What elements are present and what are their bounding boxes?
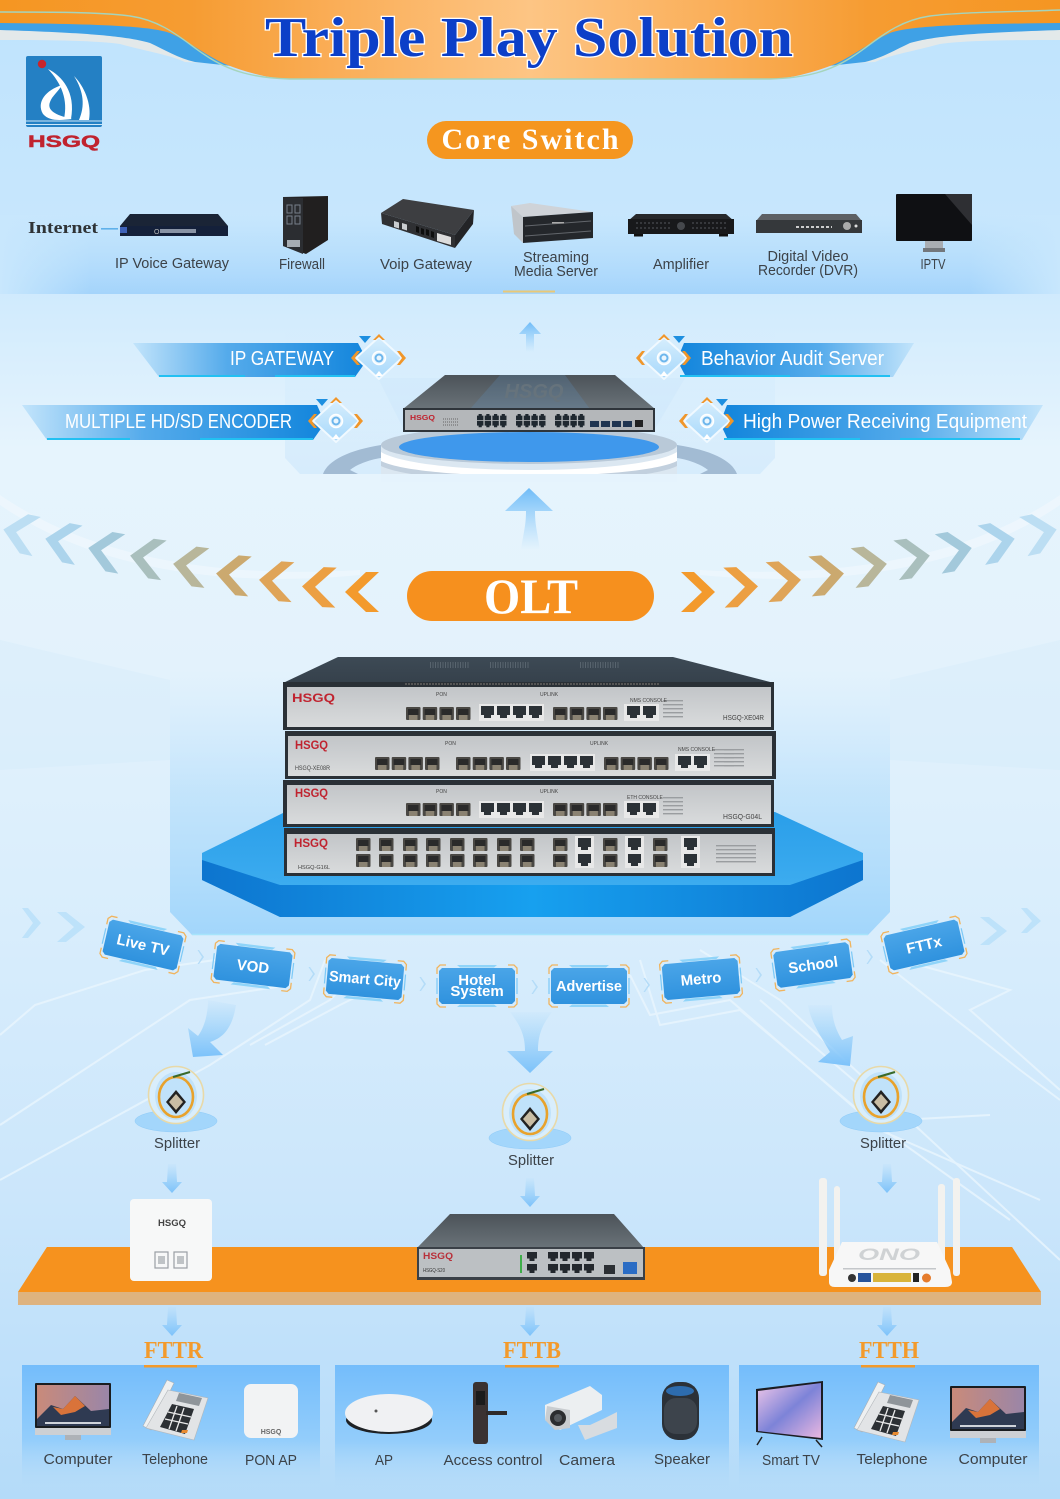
unit: HSGQ-XE04R: HSGQ xyxy=(292,693,335,705)
panel: OLT stage xyxy=(170,670,890,935)
device: Digital Video Recorder xyxy=(756,214,862,279)
device: access switch: HSGQ-S20 xyxy=(423,1268,445,1274)
device: IPTV xyxy=(896,194,972,273)
switch: 24 port core: HSGQ xyxy=(410,413,435,422)
platform xyxy=(202,812,863,917)
unit: HSGQ-XE04R: NMS CONSOLE xyxy=(630,698,668,704)
arrow: to FTTH xyxy=(877,1307,897,1336)
arrow: splitter to switch xyxy=(520,1178,540,1207)
internet label xyxy=(28,218,118,237)
access control xyxy=(444,1382,542,1469)
device: router xyxy=(819,1178,960,1287)
unit: HSGQ-G16L: HSGQ xyxy=(294,838,328,850)
tag: FTTx: FTTx xyxy=(905,933,944,958)
unit: HSGQ-XE08R: PON xyxy=(445,741,456,747)
arrow: to FTTB xyxy=(520,1307,540,1336)
unit: HSGQ-G04L xyxy=(283,780,774,827)
device: router: ONO xyxy=(858,1245,920,1264)
device: IP Voice Gateway: IP Voice Gateway xyxy=(115,256,230,272)
banner: MULTIPLE HD/SD ENCODER: MULTIPLE HD/SD ENCODER xyxy=(65,411,292,433)
arrow: to center splitter xyxy=(507,1012,553,1073)
splitter: right: Splitter xyxy=(860,1136,906,1152)
header banner xyxy=(0,0,1060,79)
arrow: to core row xyxy=(519,322,541,352)
computer xyxy=(35,1383,113,1468)
AP: AP xyxy=(375,1453,393,1469)
tag: School xyxy=(770,939,856,991)
title: Triple Play Solution xyxy=(265,7,793,69)
telephone: Telephone xyxy=(142,1452,208,1468)
core switch pill: Core Switch xyxy=(442,123,619,156)
OLT pill xyxy=(407,568,654,624)
banner: MULTIPLE HD/SD ENCODER xyxy=(22,397,363,442)
device: Digital Video Recorder: Digital Video xyxy=(768,249,848,265)
tag: Hotel System: Hotel xyxy=(458,972,496,989)
logo: HSGQ xyxy=(26,56,102,151)
tag: Live TV: Live TV xyxy=(115,931,171,960)
panel: FTTR xyxy=(22,1365,320,1490)
heading: FTTB: FTTB xyxy=(503,1338,561,1364)
OLT pill: OLT xyxy=(484,568,578,624)
tag: Advertise: Advertise xyxy=(556,978,622,995)
heading: FTTH: FTTH xyxy=(859,1338,919,1364)
stage cylinder xyxy=(323,426,737,482)
tag: Advertise xyxy=(549,965,629,1007)
unit: HSGQ-XE08R: NMS CONSOLE xyxy=(678,747,716,753)
tag: FTTx xyxy=(880,916,968,974)
device: access switch: HSGQ xyxy=(423,1251,453,1261)
panel: FTTB xyxy=(335,1365,729,1492)
heading: FTTR: FTTR xyxy=(144,1338,204,1364)
speaker: Speaker xyxy=(654,1452,710,1468)
splitter: left: Splitter xyxy=(154,1136,200,1152)
unit: HSGQ-G04L: UPLINK xyxy=(540,789,559,795)
unit: HSGQ-G04L: ETH CONSOLE xyxy=(627,795,664,801)
device: IPTV: IPTV xyxy=(920,257,946,273)
unit: HSGQ-XE08R: HSGQ xyxy=(295,740,328,752)
banner: IP GATEWAY xyxy=(133,334,406,379)
circuit lines background xyxy=(0,950,1060,1260)
computer: Computer xyxy=(958,1452,1028,1468)
device: Amplifier xyxy=(628,214,734,273)
unit: HSGQ-G04L: HSGQ xyxy=(295,788,328,800)
icon: target hexagon xyxy=(636,334,691,379)
PON AP xyxy=(244,1384,298,1469)
banner: Behavior Audit Server: Behavior Audit Server xyxy=(701,348,884,370)
device: Streaming Media Server xyxy=(511,203,598,280)
arrow: to right splitter xyxy=(808,1005,853,1066)
panel: FTTH xyxy=(739,1365,1039,1490)
switch: 24 port core: HSGQ xyxy=(505,381,564,403)
device: Voip Gateway: Voip Gateway xyxy=(380,257,473,273)
PON AP: PON AP xyxy=(245,1453,297,1469)
orange shelf xyxy=(18,1247,1041,1305)
speaker xyxy=(654,1382,710,1468)
unit: HSGQ-XE08R xyxy=(285,731,776,779)
tag: Smart City xyxy=(323,955,407,1003)
telephone xyxy=(142,1380,208,1468)
splitter: right xyxy=(840,1066,922,1152)
AP xyxy=(345,1394,433,1469)
arrow: OLT to core xyxy=(505,488,553,550)
logo: HSGQ: HSGQ xyxy=(28,132,100,151)
banner: High Power Receiving Equipment: High Power Receiving Equipment xyxy=(743,411,1027,433)
device: IP Voice Gateway: O xyxy=(154,229,160,236)
camera: Camera xyxy=(559,1453,616,1469)
banner: Behavior Audit Server xyxy=(636,334,914,379)
unit: HSGQ-XE04R xyxy=(283,657,774,730)
tag: Metro: Metro xyxy=(680,969,722,990)
computer: Computer xyxy=(44,1452,113,1468)
device: Firewall: Firewall xyxy=(279,257,325,273)
arrow: splitter to router xyxy=(877,1164,897,1193)
smart TV: Smart TV xyxy=(762,1453,820,1469)
device: Firewall xyxy=(279,196,328,273)
internet label: Internet xyxy=(28,218,98,237)
unit: HSGQ-G04L: HSGQ-G04L xyxy=(723,814,762,821)
unit: HSGQ-G04L: PON xyxy=(436,789,447,795)
core device row background xyxy=(0,215,1060,294)
device: wall AP: HSGQ xyxy=(158,1218,186,1229)
icon: target hexagon xyxy=(351,334,406,379)
tag: Live TV xyxy=(99,916,187,974)
tag: Smart City: Smart City xyxy=(328,968,402,991)
tag: VOD: VOD xyxy=(236,957,270,977)
tag: Hotel System xyxy=(437,965,517,1007)
switch: 24 port core xyxy=(403,375,655,432)
device: Amplifier: Amplifier xyxy=(653,257,709,273)
unit: HSGQ-XE04R: PON xyxy=(436,692,447,698)
arrow: to FTTR xyxy=(162,1307,182,1336)
icon: target hexagon xyxy=(679,397,734,442)
tag: School: School xyxy=(787,954,839,977)
chevrons: right fan xyxy=(681,510,1060,612)
tag: Hotel System: System xyxy=(450,983,504,1000)
unit: HSGQ-XE08R: HSGQ-XE08R xyxy=(295,766,331,772)
device: IP Voice Gateway xyxy=(115,214,230,272)
OLT stack xyxy=(283,657,776,876)
device: Streaming Media Server: Media Server xyxy=(514,264,598,280)
banner: High Power Receiving Equipment xyxy=(679,397,1043,442)
arrow: splitter to AP xyxy=(162,1164,182,1193)
chevrons: between tags xyxy=(198,950,873,994)
unit: HSGQ-XE04R: HSGQ-XE04R xyxy=(723,715,764,722)
arrow: to left splitter xyxy=(188,1000,236,1057)
smart TV xyxy=(756,1381,823,1469)
device: Digital Video Recorder: Recorder (DVR) xyxy=(758,263,858,279)
chevrons: left fan xyxy=(0,510,379,612)
chevrons: right double xyxy=(980,908,1041,945)
unit: HSGQ-XE08R: UPLINK xyxy=(590,741,609,747)
device: Streaming Media Server: Streaming xyxy=(523,250,589,266)
device: wall AP xyxy=(130,1199,212,1281)
unit: HSGQ-XE04R: UPLINK xyxy=(540,692,559,698)
telephone xyxy=(854,1382,928,1468)
PON AP: HSGQ xyxy=(261,1429,282,1436)
device: access switch xyxy=(417,1214,645,1280)
banner: IP GATEWAY: IP GATEWAY xyxy=(230,348,334,370)
panel: core switch stage xyxy=(285,320,775,474)
computer xyxy=(950,1386,1028,1468)
chevrons: left double xyxy=(22,908,85,942)
camera xyxy=(545,1386,617,1469)
splitter: left xyxy=(135,1066,217,1152)
telephone: Telephone xyxy=(856,1452,928,1468)
unit: HSGQ-G16L: HSGQ-G16L xyxy=(298,865,330,871)
tag: Metro xyxy=(659,955,743,1003)
device: Voip Gateway xyxy=(380,199,474,273)
splitter: center: Splitter xyxy=(508,1153,554,1169)
tag: VOD xyxy=(211,940,295,992)
splitter: center xyxy=(489,1084,571,1169)
access control: Access control xyxy=(444,1453,542,1469)
unit: HSGQ-G16L xyxy=(284,828,775,876)
icon: target hexagon xyxy=(308,397,363,442)
